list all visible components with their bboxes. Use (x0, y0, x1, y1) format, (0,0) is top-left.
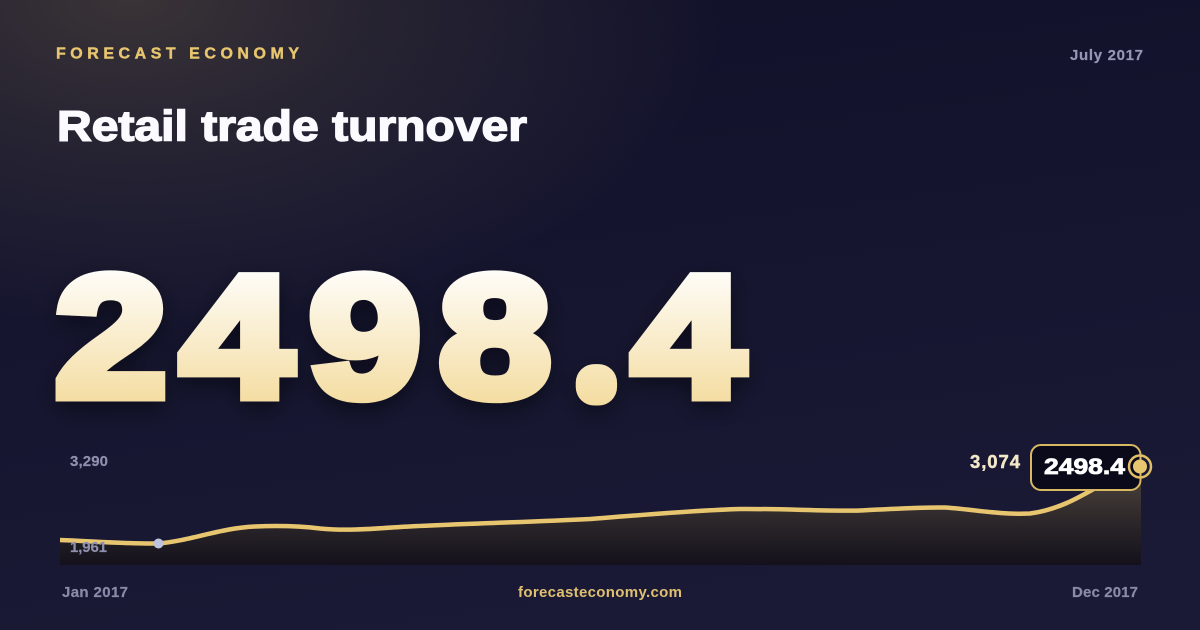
low point marker (154, 538, 164, 548)
value pill (1031, 445, 1140, 490)
end date label: Dec 2017 (1072, 584, 1138, 601)
big value: 4 (632, 241, 744, 433)
title: Retail trade turnover (57, 102, 527, 150)
end point marker (1129, 456, 1151, 478)
start date label: Jan 2017 (62, 584, 128, 601)
axis min label: 1,961 (70, 539, 107, 556)
line chart (60, 445, 1151, 565)
axis max label: 3,290 (70, 453, 108, 470)
big value: . (592, 361, 601, 394)
value pill: 2498.4 (1044, 454, 1126, 479)
date label: July 2017 (1070, 47, 1143, 64)
chart line (60, 466, 1141, 544)
brand label: FORECAST ECONOMY (56, 46, 299, 62)
high value label: 3,074 (970, 451, 1021, 472)
big value: 2498 (55, 241, 551, 433)
chart area fill (60, 466, 1141, 565)
website: forecasteconomy.com (518, 584, 682, 601)
